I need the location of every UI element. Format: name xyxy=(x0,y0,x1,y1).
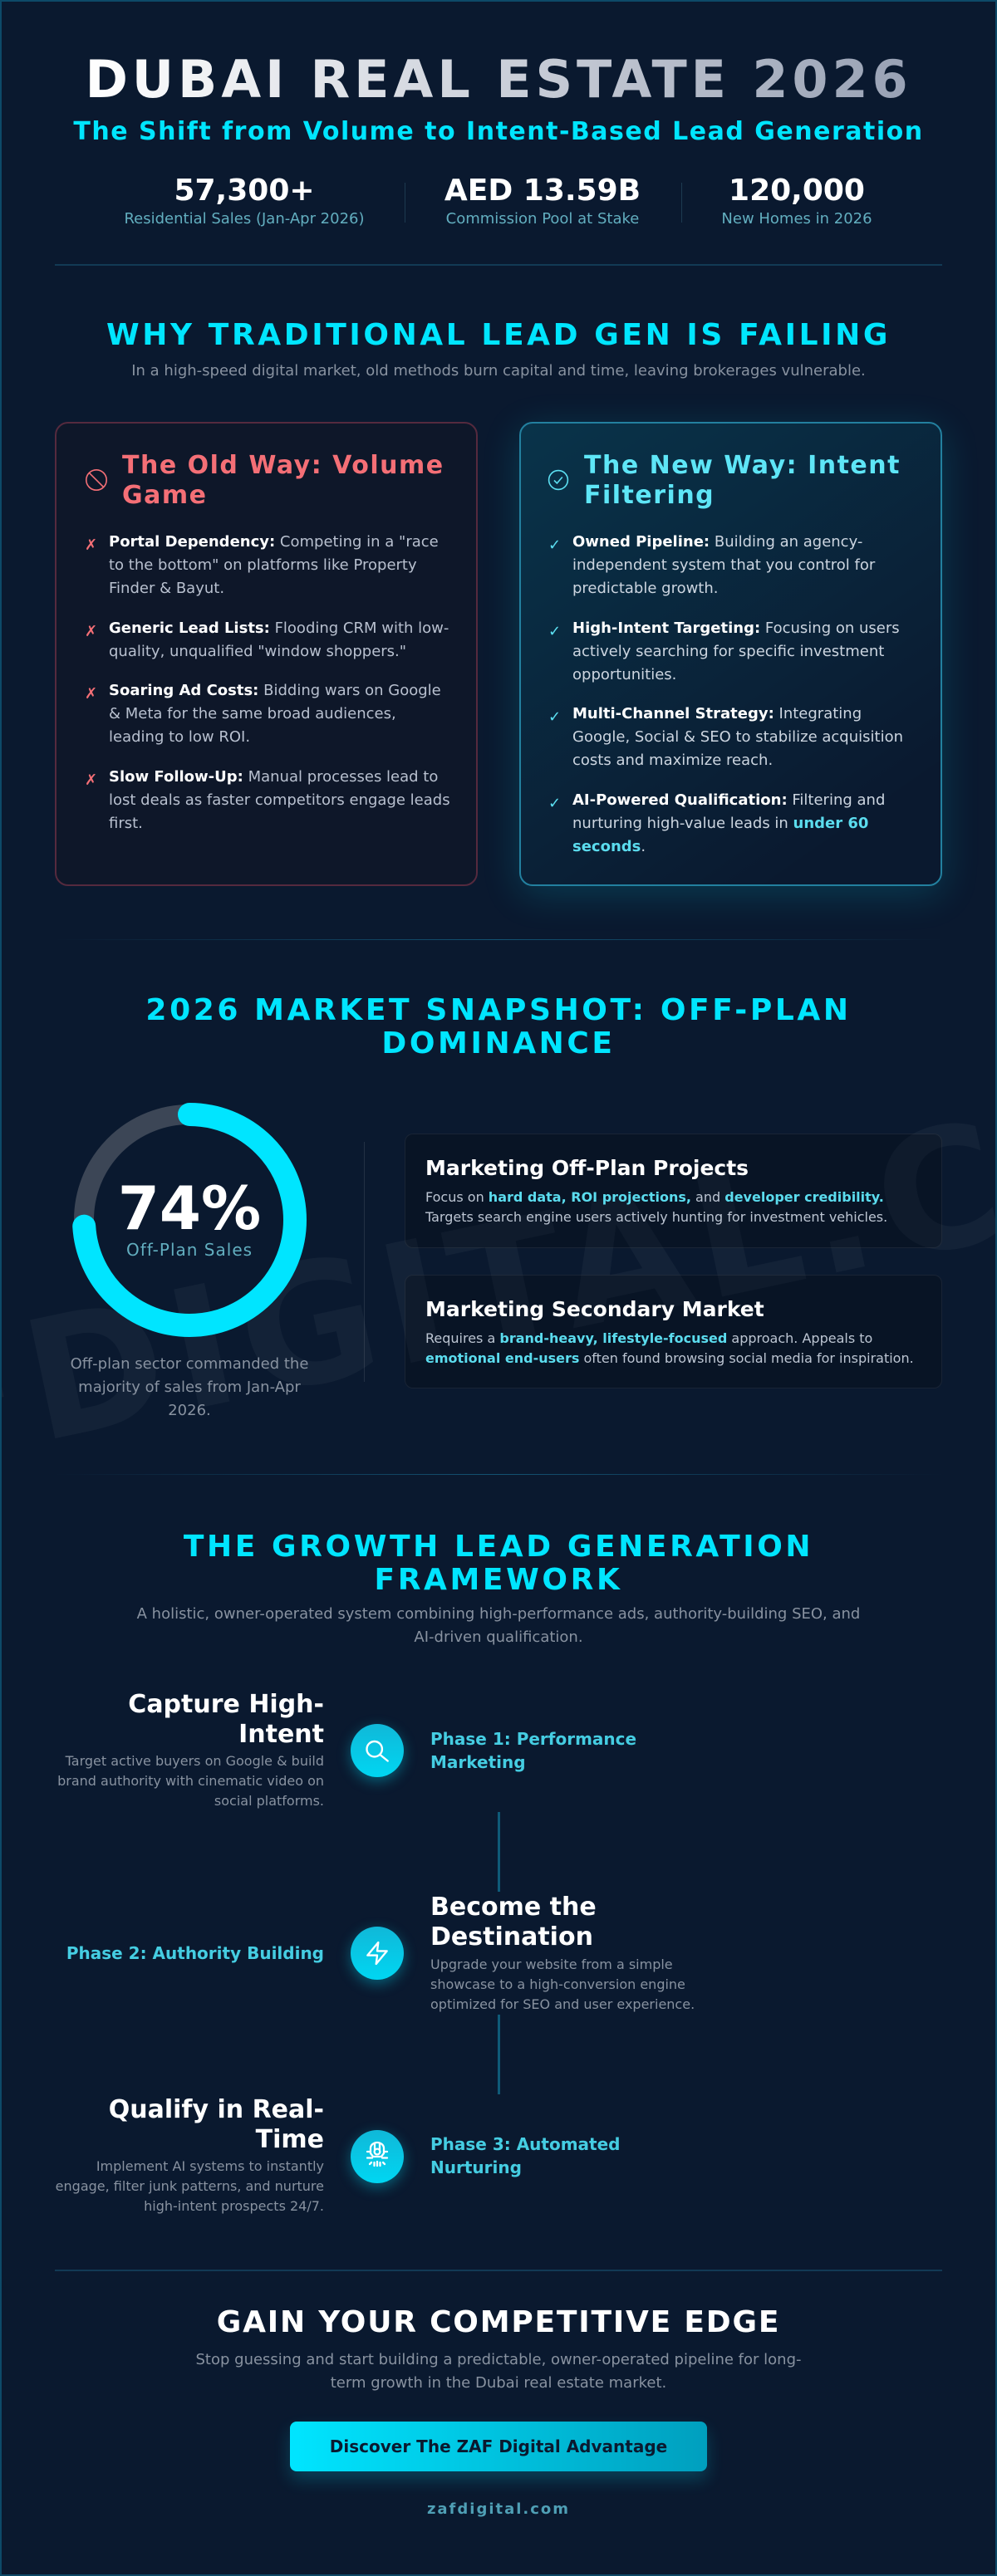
card: marketing off-plan xyxy=(405,1134,942,1248)
old way list: ✗ xyxy=(85,771,97,789)
new way list: predictable growth. xyxy=(572,580,718,597)
new way list: Owned Pipeline: Building an agency- xyxy=(572,533,862,551)
intro text: In a high-speed digital market, old methods burn capital and time, leaving brokerages vulnerable. xyxy=(131,362,866,380)
old way list xyxy=(85,533,450,832)
phase 3 label xyxy=(430,2134,620,2177)
phase 1 label xyxy=(430,1729,636,1772)
card text xyxy=(425,1189,887,1225)
intro text: A holistic, owner-operated system combining high-performance ads, authority-building SEO, and xyxy=(137,1605,860,1623)
stat: new homes xyxy=(721,174,872,228)
footer call to action xyxy=(55,2270,942,2518)
phase 3 label: Phase 3: Automated xyxy=(430,2134,620,2154)
old way list: Portal Dependency: Competing in a "race xyxy=(109,533,439,551)
phase 1 text xyxy=(57,1690,324,1809)
old way list: ✗ xyxy=(85,536,97,554)
new way list: Multi-Channel Strategy: Integrating xyxy=(572,705,862,722)
card heading: Marketing Off-Plan Projects xyxy=(425,1156,749,1180)
phase 1 text: social platforms. xyxy=(214,1793,324,1809)
new way list: seconds. xyxy=(572,838,646,855)
old way list: leading to low ROI. xyxy=(109,728,250,746)
donut caption xyxy=(71,1355,308,1419)
new way list: High-Intent Targeting: Focusing on users xyxy=(572,620,900,637)
new way list xyxy=(548,533,903,855)
new way list: ✓ xyxy=(548,536,561,554)
icon: search xyxy=(351,1724,404,1777)
old way list: Soaring Ad Costs: Bidding wars on Google xyxy=(109,682,441,699)
card text: Targets search engine users actively hunting for investment vehicles. xyxy=(425,1209,887,1225)
old way list: Finder & Bayut. xyxy=(109,580,224,597)
new way list: Google, Social & SEO to stabilize acquisition xyxy=(572,728,903,746)
heading: THE GROWTH LEAD GENERATION xyxy=(184,1530,813,1564)
phase 1 label: Marketing xyxy=(430,1752,526,1772)
phase 1 text: brand authority with cinematic video on xyxy=(57,1773,324,1789)
old way list: first. xyxy=(109,815,143,832)
phase 1 text: Intent xyxy=(238,1720,324,1749)
new way list: independent system that you control for xyxy=(572,556,875,574)
phase 1 text: Target active buyers on Google & build xyxy=(66,1753,324,1769)
panel: old way xyxy=(55,422,478,886)
card text: Requires a brand-heavy, lifestyle-focused approach. Appeals to xyxy=(425,1330,872,1346)
old way list: quality, unqualified "window shoppers." xyxy=(109,643,406,660)
new way list: costs and maximize reach. xyxy=(572,752,773,769)
old way list: ✗ xyxy=(85,685,97,703)
new way list: nurturing high-value leads in under 60 xyxy=(572,815,868,832)
header xyxy=(55,49,942,266)
icon: bot xyxy=(351,2129,404,2182)
old way list: ✗ xyxy=(85,623,97,640)
new way list: ✓ xyxy=(548,708,561,726)
donut label: Off-Plan Sales xyxy=(126,1240,253,1260)
stat: new homes: 120,000 xyxy=(729,174,865,208)
heading xyxy=(145,993,852,1060)
website: zafdigital.com xyxy=(427,2500,570,2518)
heading: FRAMEWORK xyxy=(375,1563,622,1597)
heading: 2026 MARKET SNAPSHOT: OFF-PLAN xyxy=(145,993,852,1027)
subtitle: The Shift from Volume to Intent-Based Lead Generation xyxy=(73,117,924,146)
stat: commission pool: Commission Pool at Stake xyxy=(446,210,639,228)
title: DUBAI REAL ESTATE 2026 xyxy=(85,49,912,110)
closing text: term growth in the Dubai real estate market. xyxy=(331,2374,666,2392)
old way heading: Game xyxy=(122,481,207,510)
phase 2 text: Upgrade your website from a simple xyxy=(430,1956,673,1972)
donut caption: majority of sales from Jan-Apr xyxy=(78,1379,301,1396)
closing text: Stop guessing and start building a predictable, owner-operated pipeline for long- xyxy=(196,2351,801,2368)
card text: emotional end-users often found browsing social media for inspiration. xyxy=(425,1350,914,1366)
old way list: lost deals as faster competitors engage leads xyxy=(109,791,450,809)
stat: commission pool: AED 13.59B xyxy=(444,174,641,208)
donut caption: Off-plan sector commanded the xyxy=(71,1355,308,1373)
button xyxy=(290,2422,707,2471)
new way heading: Filtering xyxy=(584,481,715,510)
card heading: Marketing Secondary Market xyxy=(425,1297,764,1321)
stat: new homes: New Homes in 2026 xyxy=(721,210,872,228)
old way list: & Meta for the same broad audiences, xyxy=(109,705,396,722)
card text xyxy=(425,1330,914,1366)
stat: residential sales: Residential Sales (Jan-Apr 2026) xyxy=(124,210,365,228)
icon: lightning xyxy=(351,1927,404,1980)
stat: commission pool xyxy=(444,174,641,228)
phase 2 text: showcase to a high-conversion engine xyxy=(430,1976,685,1992)
new way heading xyxy=(584,451,901,510)
intro text xyxy=(136,1605,860,1646)
donut caption: 2026. xyxy=(168,1402,211,1419)
new way heading: The New Way: Intent xyxy=(584,451,901,480)
old way list: Slow Follow-Up: Manual processes lead to xyxy=(109,768,438,786)
button: Discover The ZAF Digital Advantage xyxy=(330,2436,667,2456)
donut chart: 74% xyxy=(72,1103,307,1337)
phase 1 label: Phase 1: Performance xyxy=(430,1729,636,1749)
section: market snapshot xyxy=(71,993,942,1419)
heading: WHY TRADITIONAL LEAD GEN IS FAILING xyxy=(106,318,891,352)
phase 3 text: Qualify in Real- xyxy=(109,2095,324,2124)
closing heading: GAIN YOUR COMPETITIVE EDGE xyxy=(217,2305,780,2339)
new way list: AI-Powered Qualification: Filtering and xyxy=(572,791,885,809)
phase 2 text xyxy=(430,1893,695,2012)
phase 1 text: Capture High- xyxy=(128,1690,324,1719)
new way list: ✓ xyxy=(548,795,561,812)
closing text xyxy=(196,2351,801,2392)
phase 3 text: Time xyxy=(256,2125,324,2154)
new way list: ✓ xyxy=(548,623,561,640)
stat: residential sales xyxy=(124,174,365,228)
new way list: opportunities. xyxy=(572,666,676,683)
heading xyxy=(184,1530,813,1597)
phase 3 text: Implement AI systems to instantly xyxy=(96,2158,324,2174)
section: why traditional lead gen is failing xyxy=(55,318,953,905)
phase 2 label: Phase 2: Authority Building xyxy=(66,1943,324,1963)
new way list: actively searching for specific investment xyxy=(572,643,884,660)
stat: residential sales: 57,300+ xyxy=(174,174,315,208)
section: growth framework xyxy=(56,1530,860,2214)
phase 3 text: engage, filter junk patterns, and nurture xyxy=(56,2178,324,2194)
phase 3 text: high-intent prospects 24/7. xyxy=(144,2198,324,2214)
phase 2 text: optimized for SEO and user experience. xyxy=(430,1996,695,2012)
phase 3 label: Nurturing xyxy=(430,2157,522,2177)
panel: new way xyxy=(519,422,942,886)
intro text: AI-driven qualification. xyxy=(414,1628,583,1646)
donut value: 74% xyxy=(118,1173,261,1243)
card: marketing secondary xyxy=(405,1275,942,1388)
old way list: to the bottom" on platforms like Property xyxy=(109,556,417,574)
phase 2 text: Become the xyxy=(430,1893,597,1922)
icon: prohibited xyxy=(86,469,107,491)
old way heading xyxy=(122,451,444,510)
icon: check circle xyxy=(548,470,568,490)
old way heading: The Old Way: Volume xyxy=(122,451,444,480)
phase 2 text: Destination xyxy=(430,1922,593,1952)
old way list: Generic Lead Lists: Flooding CRM with low- xyxy=(109,620,449,637)
heading: DOMINANCE xyxy=(381,1026,616,1060)
card text: Focus on hard data, ROI projections, and developer credibility. xyxy=(425,1189,884,1205)
phase 3 text xyxy=(56,2095,324,2214)
